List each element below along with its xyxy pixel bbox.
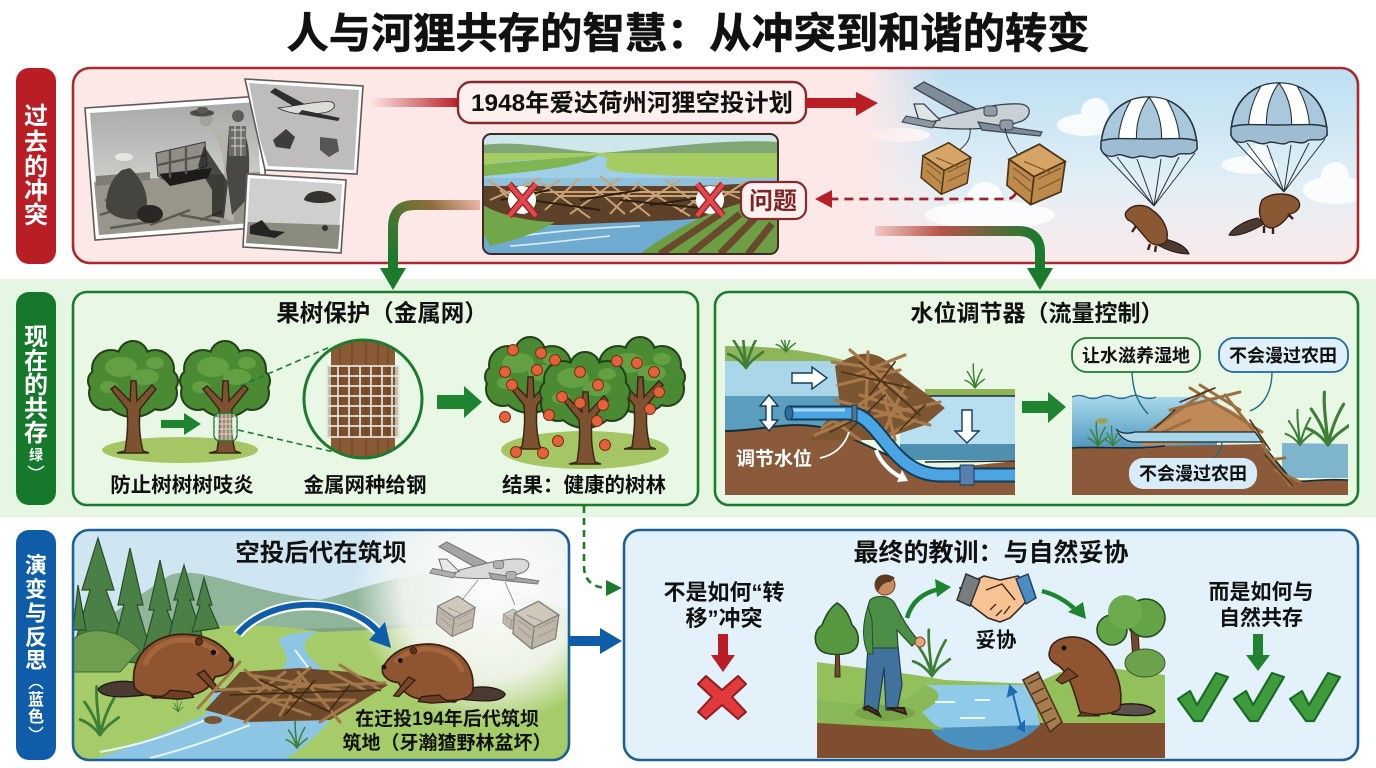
reeds	[726, 340, 764, 370]
icon: handshake	[957, 574, 1036, 622]
text: how to coexist: 自然共存	[1219, 606, 1303, 630]
section tab: past conflict: 去	[24, 129, 48, 156]
section tab: present coexistence: 绿	[29, 447, 43, 463]
icon: red x	[698, 676, 746, 719]
panel heading: 空投后代在筑坝	[235, 539, 407, 567]
section tab: past conflict: 冲	[24, 178, 48, 205]
callout: farmland safe bottom: 不会漫过农田	[1139, 464, 1247, 484]
arrow: plan to airdrop	[806, 92, 878, 116]
panel: final lesson	[624, 530, 1358, 760]
section tab: evolution and reflection	[16, 530, 56, 760]
water level arrows	[1008, 686, 1024, 731]
tree with mesh	[181, 342, 269, 453]
diagram: protected wetland	[1072, 385, 1348, 495]
text: how to coexist	[1208, 581, 1314, 630]
section tab: evolution and reflection: 与	[25, 601, 47, 626]
dashed arrow: problem link	[815, 190, 1016, 208]
text: not how to transfer: 不是如何“转	[663, 580, 785, 605]
beaver right	[381, 644, 505, 703]
icon: left tree	[815, 603, 858, 677]
beaver left	[98, 634, 234, 699]
problem tag	[741, 182, 806, 219]
panel heading: 水位调节器（流量控制）	[910, 300, 1164, 326]
text: not how to transfer	[663, 580, 785, 631]
panel heading: 最终的教训：与自然妥协	[853, 539, 1129, 567]
parachuting beaver left	[1101, 97, 1197, 254]
airdrop plane and crates	[902, 82, 1065, 205]
ground ellipse under trees	[102, 437, 258, 463]
section tab: evolution and reflection: 蓝	[28, 691, 44, 709]
arrow: lead-in to plan title	[370, 98, 460, 107]
sticks dam	[1023, 672, 1062, 732]
title: 人与河狸共存的智慧：从冲突到和谐的转变	[286, 10, 1090, 57]
arrow: to result	[437, 386, 482, 418]
section tab: present coexistence	[16, 292, 56, 505]
panel: fruit tree protection	[73, 292, 698, 505]
fruit trees	[486, 338, 684, 464]
distant hills	[114, 572, 568, 630]
panel heading: 果树保护（金属网）	[276, 299, 488, 326]
arrow: handshake to beaver	[1042, 591, 1086, 619]
callout: farmland safe top	[1219, 338, 1348, 372]
section tab: evolution and reflection: 演	[25, 553, 47, 578]
faded plane and crates	[430, 542, 559, 649]
icon: check 2	[1234, 673, 1284, 721]
dam of sticks	[198, 662, 388, 722]
section tab: evolution and reflection: 思	[25, 648, 47, 673]
icon: check 3	[1290, 673, 1340, 721]
icon: check 1	[1178, 673, 1228, 721]
page background band: present section	[0, 279, 1376, 517]
illustration: dam blocks the farmland	[483, 134, 778, 254]
tree before	[89, 342, 177, 453]
arrow: evolution to lesson	[569, 628, 622, 654]
dashed callout lines	[238, 347, 334, 452]
icon: red x right	[696, 184, 724, 216]
section tab: past conflict: 的	[24, 154, 48, 181]
text: how to coexist: 而是如何与	[1208, 581, 1314, 604]
panel: fruit tree protection: 结果：健康的树林	[502, 473, 666, 497]
section tab: present coexistence: 存	[24, 420, 48, 447]
clouds	[870, 98, 1367, 229]
plan title pill: 1948年爱达荷州河狸空投计划	[471, 90, 793, 117]
zoom circle: wire mesh on trunk	[304, 340, 422, 460]
parachuting beaver right	[1229, 83, 1327, 235]
section tab: present coexistence: 现	[24, 324, 48, 351]
river	[90, 632, 345, 760]
arrow: dashed link from orchard to lesson	[584, 506, 622, 596]
scene: person and beaver compromise	[815, 574, 1165, 758]
arrow: person to handshake	[907, 579, 951, 618]
panel: second generation builds dams: 筑地（牙瀚猹野林盆坏）	[342, 731, 552, 754]
orchard ground	[501, 431, 669, 469]
callout: farmland safe top: 不会漫过农田	[1229, 346, 1337, 366]
arrow: apply mesh	[161, 413, 201, 435]
photo: plane dropping crates	[245, 79, 363, 174]
icon: right tree	[1097, 595, 1165, 677]
panel: water level regulator	[715, 292, 1358, 505]
panel: past conflict	[73, 68, 1367, 263]
fir forest	[73, 538, 219, 665]
section tab: evolution and reflection: 变	[25, 577, 47, 602]
section tab: evolution and reflection: 色	[28, 707, 44, 726]
arrow: airdrop to water level regulator	[875, 231, 1053, 290]
outlet pipe	[790, 413, 1015, 475]
section tab: past conflict	[16, 68, 56, 264]
panel: second generation builds dams	[73, 530, 569, 760]
label: compromise: 妥协	[976, 629, 1017, 652]
callout: nourish wetland	[1072, 338, 1200, 372]
caption: 在迂投194年后代筑坝	[355, 707, 539, 730]
stick pile	[810, 354, 945, 440]
section tab: present coexistence: 共	[24, 396, 48, 423]
text: not how to transfer: 移”冲突	[685, 606, 763, 631]
callout lines	[1132, 372, 1272, 464]
section tab: present coexistence: 的	[24, 372, 48, 399]
reeds	[913, 630, 950, 676]
section tab: past conflict: 突	[24, 202, 48, 229]
callout: nourish wetland: 让水滋养湿地	[1082, 345, 1190, 366]
person	[855, 575, 925, 721]
problem tag: 问题	[749, 188, 797, 215]
arrow: generations arc	[238, 605, 391, 648]
panel: fruit tree protection: 金属网种给钢	[304, 473, 426, 497]
photo: men lifting crate	[85, 96, 268, 240]
caption: 调节水位	[736, 447, 812, 470]
icon: red x left	[508, 184, 536, 216]
arrow: down green	[1246, 634, 1270, 671]
beaver upright	[1049, 637, 1155, 716]
arrow: dam problem to fruit tree protection	[380, 205, 480, 290]
diagram: flow device through the dam	[725, 324, 1015, 495]
section tab: past conflict: 过	[24, 103, 48, 130]
reeds	[80, 687, 119, 735]
meadow	[73, 624, 569, 760]
plan title pill	[458, 82, 806, 123]
fog around plane	[355, 530, 569, 730]
captions: 防止树树树吱炎	[110, 474, 254, 497]
photo: parachute over field	[243, 174, 346, 253]
white flow arrows	[760, 367, 979, 443]
callout: farmland safe bottom	[1129, 458, 1257, 489]
section tab: present coexistence: 在	[24, 348, 48, 375]
section tab: evolution and reflection: 反	[25, 625, 47, 650]
arrow: between diagrams	[1022, 392, 1066, 423]
arrow: down red	[711, 634, 735, 672]
